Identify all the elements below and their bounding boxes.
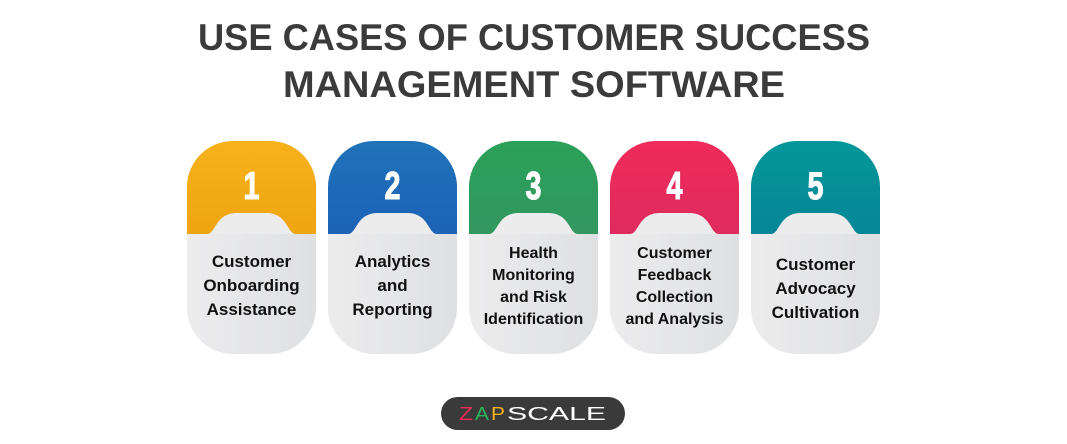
title: USE CASES OF CUSTOMER SUCCESS xyxy=(198,17,870,58)
title xyxy=(198,17,870,105)
card 2: Analytics xyxy=(355,252,430,271)
card 5: Advocacy xyxy=(775,279,856,298)
card 4: and Analysis xyxy=(625,311,724,328)
card 3: 3 xyxy=(526,165,541,208)
card 2: 2 xyxy=(385,165,400,208)
card 1: Onboarding xyxy=(203,276,300,295)
card 3: Monitoring xyxy=(492,267,575,284)
card 4: 4 xyxy=(667,165,683,208)
card 3: and Risk xyxy=(500,289,567,306)
card 3: Identification xyxy=(484,311,583,328)
card 3 xyxy=(469,141,598,354)
logo: zapscale: P xyxy=(491,404,505,424)
logo: zapscale: SCALE xyxy=(507,404,606,424)
card 3: Health xyxy=(509,245,558,262)
card 1: Assistance xyxy=(207,300,296,319)
card 4: Feedback xyxy=(638,267,712,284)
card 2 xyxy=(328,141,457,354)
card 1: 1 xyxy=(244,165,259,208)
card 4: Collection xyxy=(636,289,713,306)
card 4: Customer xyxy=(637,245,712,262)
card 1 xyxy=(187,141,316,354)
card 1: Customer xyxy=(212,252,292,271)
card 5: Customer xyxy=(776,255,856,274)
card 5: Cultivation xyxy=(772,303,859,322)
card 5 xyxy=(751,141,880,354)
card 4 xyxy=(610,141,739,354)
card 2: Reporting xyxy=(352,300,433,319)
logo: zapscale: Z xyxy=(459,404,473,424)
card 2: and xyxy=(377,276,408,295)
title: MANAGEMENT SOFTWARE xyxy=(283,64,785,105)
logo: zapscale xyxy=(441,397,625,430)
card 5: 5 xyxy=(808,165,823,208)
logo: zapscale: A xyxy=(475,404,489,424)
